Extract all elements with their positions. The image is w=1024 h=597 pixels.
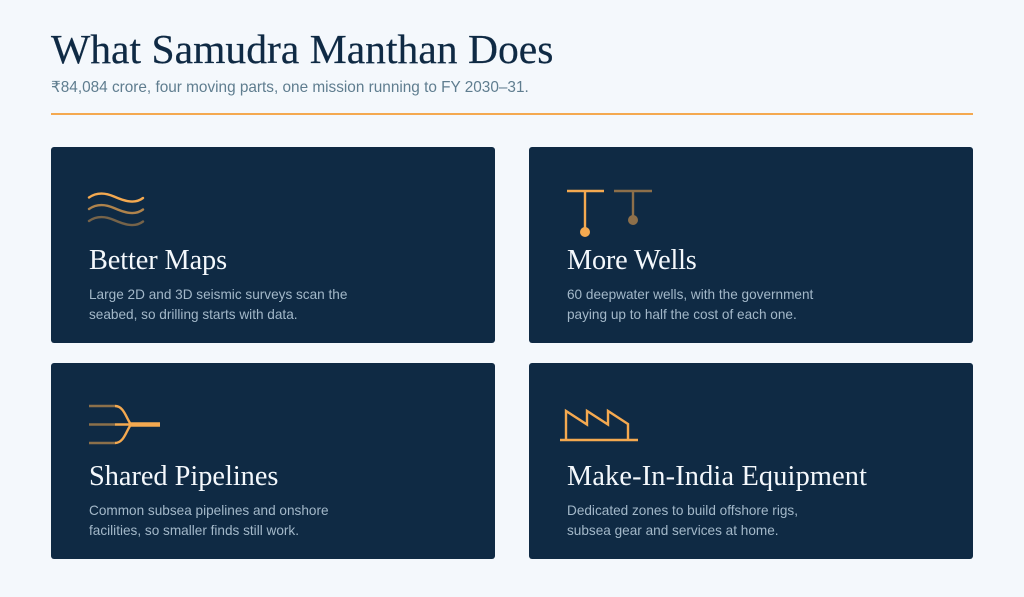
description: facilities, so smaller finds still work. <box>89 523 299 538</box>
description: paying up to half the cost of each one. <box>567 307 797 322</box>
title: What Samudra Manthan Does <box>51 26 553 72</box>
heading: More Wells <box>567 245 697 276</box>
panel: more wells <box>529 147 973 343</box>
description <box>89 503 329 538</box>
header rule <box>51 113 973 115</box>
description <box>567 287 814 322</box>
heading: Make-In-India Equipment <box>567 461 867 492</box>
icon: converging pipelines <box>89 404 160 444</box>
icon: wells <box>567 190 652 237</box>
panel: better maps <box>51 147 495 343</box>
heading: Shared Pipelines <box>89 461 278 492</box>
panel: shared pipelines <box>51 363 495 559</box>
subtitle: ₹84,084 crore, four moving parts, one mission running to FY 2030–31. <box>51 79 529 96</box>
description: Common subsea pipelines and onshore <box>89 503 329 518</box>
description: 60 deepwater wells, with the government <box>567 287 813 302</box>
description: Dedicated zones to build offshore rigs, <box>567 503 798 518</box>
heading: Better Maps <box>89 245 227 276</box>
icon: waves <box>88 192 144 226</box>
description: Large 2D and 3D seismic surveys scan the <box>89 287 347 302</box>
panel: make-in-india equipment <box>529 363 973 559</box>
description: seabed, so drilling starts with data. <box>89 307 298 322</box>
description <box>89 287 347 322</box>
description: subsea gear and services at home. <box>567 523 779 538</box>
icon: factory <box>560 408 638 442</box>
description <box>567 503 798 538</box>
